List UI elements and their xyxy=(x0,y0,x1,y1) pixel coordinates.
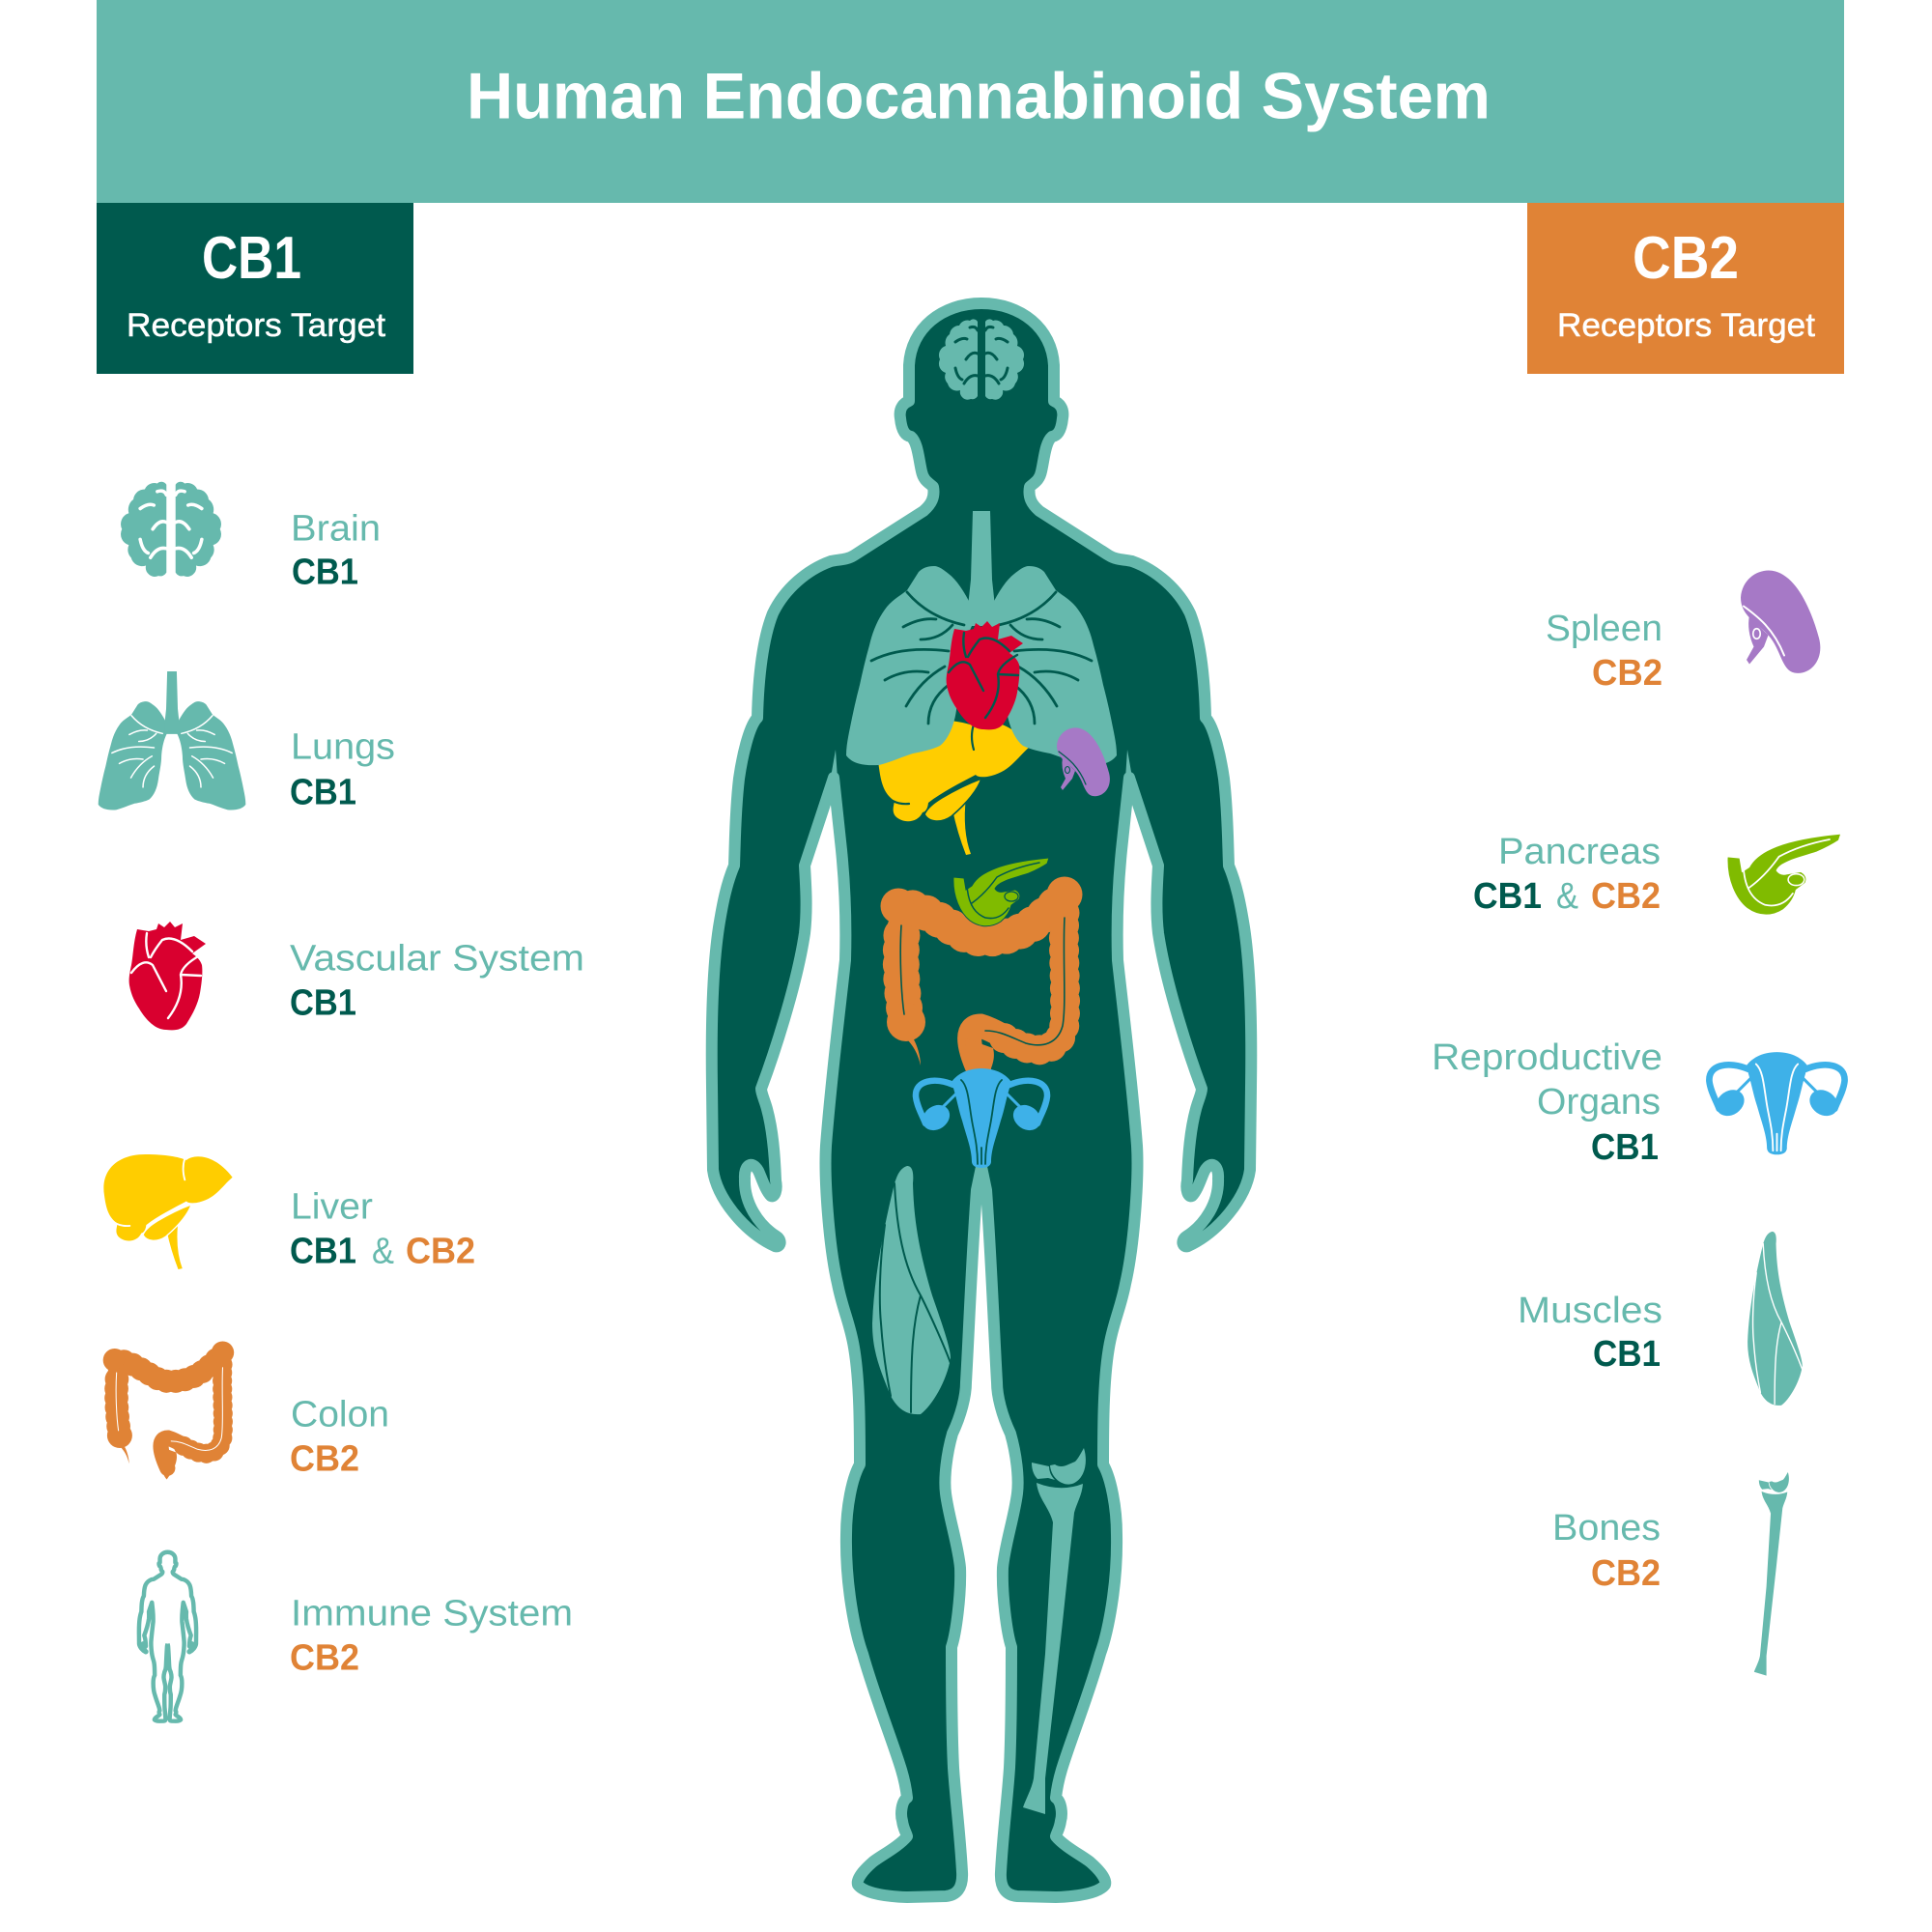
receptors: CB1 and CB2: CB2 xyxy=(1591,876,1661,917)
receptors: CB1 and CB2 xyxy=(290,1231,475,1271)
icon: muscle xyxy=(1747,1232,1803,1406)
body organ: thigh muscle xyxy=(872,1166,951,1414)
icon: liver xyxy=(103,1154,233,1269)
receptors: CB1 and CB2: CB1 xyxy=(290,1231,356,1271)
body organ: colon xyxy=(883,877,1082,1090)
label: spleen: Spleen xyxy=(1546,609,1662,649)
panel: CB2 receptors xyxy=(1527,203,1844,374)
label: reproductive: Reproductive xyxy=(1432,1037,1662,1078)
label: muscles: Muscles xyxy=(1518,1291,1662,1331)
receptor: CB2: CB2 xyxy=(1591,1553,1661,1594)
icon: bone xyxy=(1754,1472,1789,1676)
receptor: CB2: CB2 xyxy=(290,1638,359,1679)
label: colon: Colon xyxy=(291,1395,389,1435)
icon: colon xyxy=(104,1341,234,1480)
label: vascular system: Vascular System xyxy=(290,939,584,980)
icon: spleen xyxy=(1741,570,1820,673)
list item: bones xyxy=(1552,1472,1789,1676)
receptor: CB1: CB1 xyxy=(290,983,356,1024)
body organ: liver xyxy=(878,720,1030,855)
list item: spleen xyxy=(1546,570,1820,694)
icon: pancreas xyxy=(1727,834,1841,915)
body organ: pancreas xyxy=(953,858,1049,926)
icon: uterus xyxy=(1709,1052,1845,1154)
icon: brain xyxy=(121,482,221,577)
header banner xyxy=(97,0,1844,203)
title: Human Endocannabinoid System xyxy=(467,60,1491,133)
receptor: CB2: CB2 xyxy=(290,1439,359,1480)
list item: lungs xyxy=(99,671,395,813)
receptor: CB1: CB1 xyxy=(1591,1127,1659,1168)
list item: muscles xyxy=(1518,1232,1803,1406)
receptor: CB1: CB1 xyxy=(290,773,356,813)
icon: lungs xyxy=(99,671,245,810)
receptors: CB1 and CB2 xyxy=(1473,876,1661,917)
receptors: CB1 and CB2: & xyxy=(1556,876,1578,917)
list item: colon xyxy=(104,1341,389,1480)
human body figure xyxy=(712,303,1251,1897)
receptors: CB1 and CB2: CB2 xyxy=(406,1231,475,1271)
body organ: heart xyxy=(947,621,1023,729)
receptor: CB2: CB2 xyxy=(1592,653,1662,694)
list item: liver xyxy=(103,1154,475,1271)
list item: immune system xyxy=(139,1552,573,1721)
label: pancreas: Pancreas xyxy=(1498,832,1661,872)
icon: body outline xyxy=(139,1552,196,1721)
body organ: spleen xyxy=(1057,727,1110,796)
list item: reproductive organs xyxy=(1432,1037,1845,1168)
receptor: CB1: CB1 xyxy=(292,553,358,593)
body organ: reproductive organs xyxy=(916,1068,1047,1168)
panel: CB1 receptors xyxy=(97,203,413,374)
icon: heart xyxy=(129,922,206,1030)
receptors: CB1 and CB2: CB1 xyxy=(1473,876,1542,917)
receptor: CB1: CB1 xyxy=(1593,1334,1661,1375)
CB1 heading: CB1 xyxy=(202,225,301,292)
body organ: shin bone xyxy=(1023,1448,1086,1814)
list item: vascular system xyxy=(129,922,584,1030)
CB2 heading: CB2 xyxy=(1633,225,1739,292)
label: lungs: Lungs xyxy=(291,726,395,767)
receptors: CB1 and CB2: & xyxy=(372,1231,394,1271)
label: brain: Brain xyxy=(291,508,381,549)
label: bones: Bones xyxy=(1552,1508,1661,1548)
CB1 subheading: Receptors Target xyxy=(127,307,386,344)
label: immune system: Immune System xyxy=(291,1594,573,1634)
label: liver: Liver xyxy=(291,1186,373,1227)
body organ: brain xyxy=(939,319,1024,400)
body organ: lungs xyxy=(846,511,1117,765)
CB2 subheading: Receptors Target xyxy=(1557,307,1816,344)
list item: brain xyxy=(121,482,381,593)
list item: pancreas xyxy=(1473,832,1841,917)
label: organs: Organs xyxy=(1537,1082,1661,1122)
